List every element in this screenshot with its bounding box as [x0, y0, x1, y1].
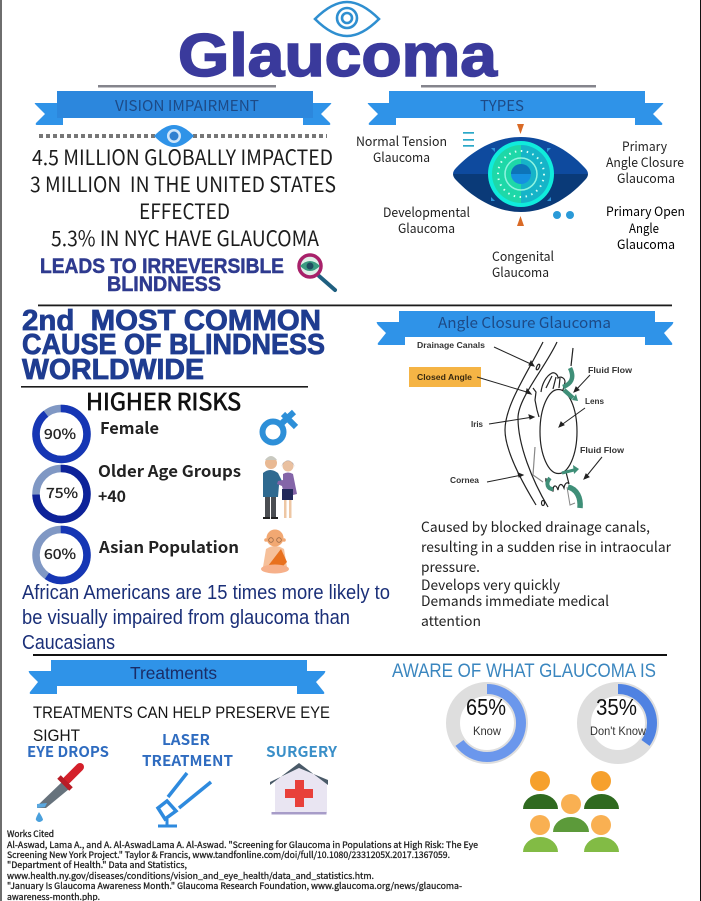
labels: glaucoma types: Primary — [622, 136, 667, 155]
ribbon: types — [368, 91, 663, 125]
ribbon: angle closure glaucoma — [377, 311, 673, 345]
text block: vision statistics: 5.3% IN NYC HAVE GLAUCOMA — [51, 223, 319, 253]
heading: second most common cause — [22, 305, 325, 386]
text block: works cited — [7, 827, 478, 901]
chart: 35% don't know: 35% — [596, 694, 637, 720]
title: Glaucoma — [178, 22, 498, 89]
heading: vision impairment: VISION IMPAIRMENT — [115, 95, 259, 116]
text block: vision statistics: EFFECTED — [139, 196, 230, 226]
heading: treatments: Treatments — [130, 663, 217, 683]
text block: works cited: Screening New York Project." Taylor & Francis, www.tandfonline.com/doi/full/10.1080/2331205X.2017.1367059. — [7, 848, 450, 861]
diagram: angle closure eye — [409, 340, 632, 508]
labels: glaucoma types: Glaucoma — [492, 262, 549, 281]
text block: treatments preserve sight: TREATMENTS CAN HELP PRESERVE EYE — [33, 703, 330, 722]
chart: 35% don't know — [584, 689, 652, 757]
icon: elderly couple — [263, 456, 297, 519]
green fluid arrows — [547, 368, 580, 508]
callout: irreversible blindness: BLINDNESS — [107, 273, 221, 296]
text block: vision statistics: 3 MILLION IN THE UNITED STATES — [30, 169, 336, 199]
labels: glaucoma types: Glaucoma — [398, 218, 455, 237]
callout: irreversible blindness: LEADS TO IRREVERSIBLE — [40, 255, 284, 278]
chart: 65% know — [453, 689, 521, 757]
labels: risk groups: Asian Population — [98, 534, 239, 558]
text block: works cited: "January Is Glaucoma Awareness Month." Glaucoma Research Foundation, www.glaucoma.org/news/glaucoma- — [7, 879, 462, 892]
heading: second most common cause: CAUSE OF BLINDNESS — [22, 329, 325, 361]
labels: risk groups: +40 — [98, 483, 126, 507]
icon: orange arrow bottom — [517, 216, 524, 226]
icon: title eye — [315, 2, 379, 36]
labels: eye anatomy: Lens — [585, 396, 604, 406]
heading: types: TYPES — [480, 95, 524, 116]
labels: glaucoma types: Normal Tension — [356, 131, 447, 150]
labels: eye anatomy: Closed Angle — [417, 372, 472, 382]
labels: treatment types — [27, 729, 337, 771]
chart: 65% know: 65% — [466, 694, 506, 720]
text block: treatments preserve sight — [33, 703, 330, 745]
annotation arrows — [477, 347, 602, 482]
labels: glaucoma types: Glaucoma — [617, 234, 675, 253]
text block: angle closure description: Demands immediate medical — [421, 591, 609, 611]
labels: glaucoma types: Angle Closure — [606, 152, 684, 171]
labels: glaucoma types: Primary Open — [606, 201, 685, 220]
icon: magnifier eye — [299, 255, 335, 290]
text block: vision statistics: 4.5 MILLION GLOBALLY IMPACTED — [32, 142, 333, 172]
ribbon: vision impairment — [35, 91, 331, 125]
labels: risk groups — [98, 415, 241, 558]
ribbon: treatments — [29, 660, 325, 694]
chart: 90% female — [36, 408, 87, 460]
text block: works cited: www.health.ny.gov/diseases/conditions/vision_and_eye_health/data_and_statistics.htm. — [7, 869, 374, 882]
labels: treatment types: EYE DROPS — [27, 741, 109, 762]
labels: treatment types: SURGERY — [266, 741, 337, 762]
heading: aware of what glaucoma is: AWARE OF WHAT GLAUCOMA IS — [392, 660, 656, 682]
labels: eye anatomy — [417, 340, 632, 485]
labels: eye anatomy: Iris — [471, 419, 483, 429]
text block: works cited: "Department of Health." Data and Statistics, — [7, 858, 187, 871]
heading: angle closure glaucoma: Angle Closure Glaucoma — [438, 312, 611, 333]
icon: types eye — [453, 124, 588, 226]
callout: irreversible blindness — [40, 255, 284, 296]
icon: laser instrument — [158, 773, 211, 826]
chart: 60% asian population: 60% — [44, 544, 76, 564]
labels: risk groups: Female — [100, 415, 159, 439]
text block: african americans: Caucasians — [22, 632, 115, 654]
chart: 90% female: 90% — [44, 424, 76, 444]
labels: treatment types: LASER — [162, 729, 210, 750]
text block: angle closure description: resulting in a sudden rise in intraocular — [421, 537, 672, 557]
icon: monk — [261, 530, 289, 574]
icon: group of people — [523, 771, 619, 852]
text block: angle closure description: pressure. — [421, 557, 480, 577]
heading: second most common cause: 2nd MOST COMMON — [22, 305, 321, 337]
icon: eye dropper — [36, 767, 80, 822]
heading: higher risks: HIGHER RISKS — [86, 383, 241, 417]
text block: treatments preserve sight: SIGHT — [33, 726, 80, 745]
text block: african americans: be visually impaired from glaucoma than — [22, 607, 350, 629]
labels: glaucoma types: Congenital — [492, 246, 554, 265]
icon: female symbol — [262, 412, 296, 442]
labels: glaucoma types — [356, 131, 685, 281]
heading: second most common cause: WORLDWIDE — [22, 354, 204, 386]
labels: eye anatomy: Fluid Flow — [588, 365, 632, 375]
text block: angle closure description — [421, 517, 672, 631]
text block: african americans: African Americans are 15 times more likely to — [22, 582, 390, 604]
labels: eye anatomy: Fluid Flow — [580, 445, 624, 455]
text block: angle closure description: Caused by blocked drainage canals, — [421, 517, 650, 537]
chart: 75% older age: 75% — [46, 483, 78, 503]
chart: 75% older age — [36, 468, 87, 520]
labels: eye anatomy: Cornea — [450, 475, 479, 485]
chart: 65% know: Know — [473, 724, 501, 738]
labels: treatment types: TREATMENT — [142, 750, 233, 771]
labels: glaucoma types: Angle — [629, 218, 659, 237]
text block: african americans — [22, 582, 390, 654]
icon: hospital — [270, 763, 328, 814]
chart: 35% don't know: Don't Know — [590, 724, 646, 738]
labels: risk groups: Older Age Groups — [98, 458, 241, 482]
text block: angle closure description: Develops very quickly — [421, 575, 561, 595]
chart: 60% asian population — [36, 530, 87, 580]
icon: orange arrow top — [517, 124, 524, 134]
labels: glaucoma types: Developmental — [383, 202, 470, 221]
labels: glaucoma types: Glaucoma — [373, 147, 430, 166]
text block: angle closure description: attention — [421, 611, 481, 631]
text block: works cited: Al-Aswad, Lama A., and A. Al-AswadLama A. Al-Aswad. "Screening for Glaucoma in Populations at High Risk: The Eye — [7, 838, 478, 851]
text block: vision statistics — [30, 142, 336, 253]
text block: works cited: Works Cited — [7, 827, 54, 840]
icon: divider eye — [154, 125, 194, 147]
labels: glaucoma types: Glaucoma — [617, 168, 675, 187]
labels: eye anatomy: Drainage Canals — [417, 340, 485, 350]
